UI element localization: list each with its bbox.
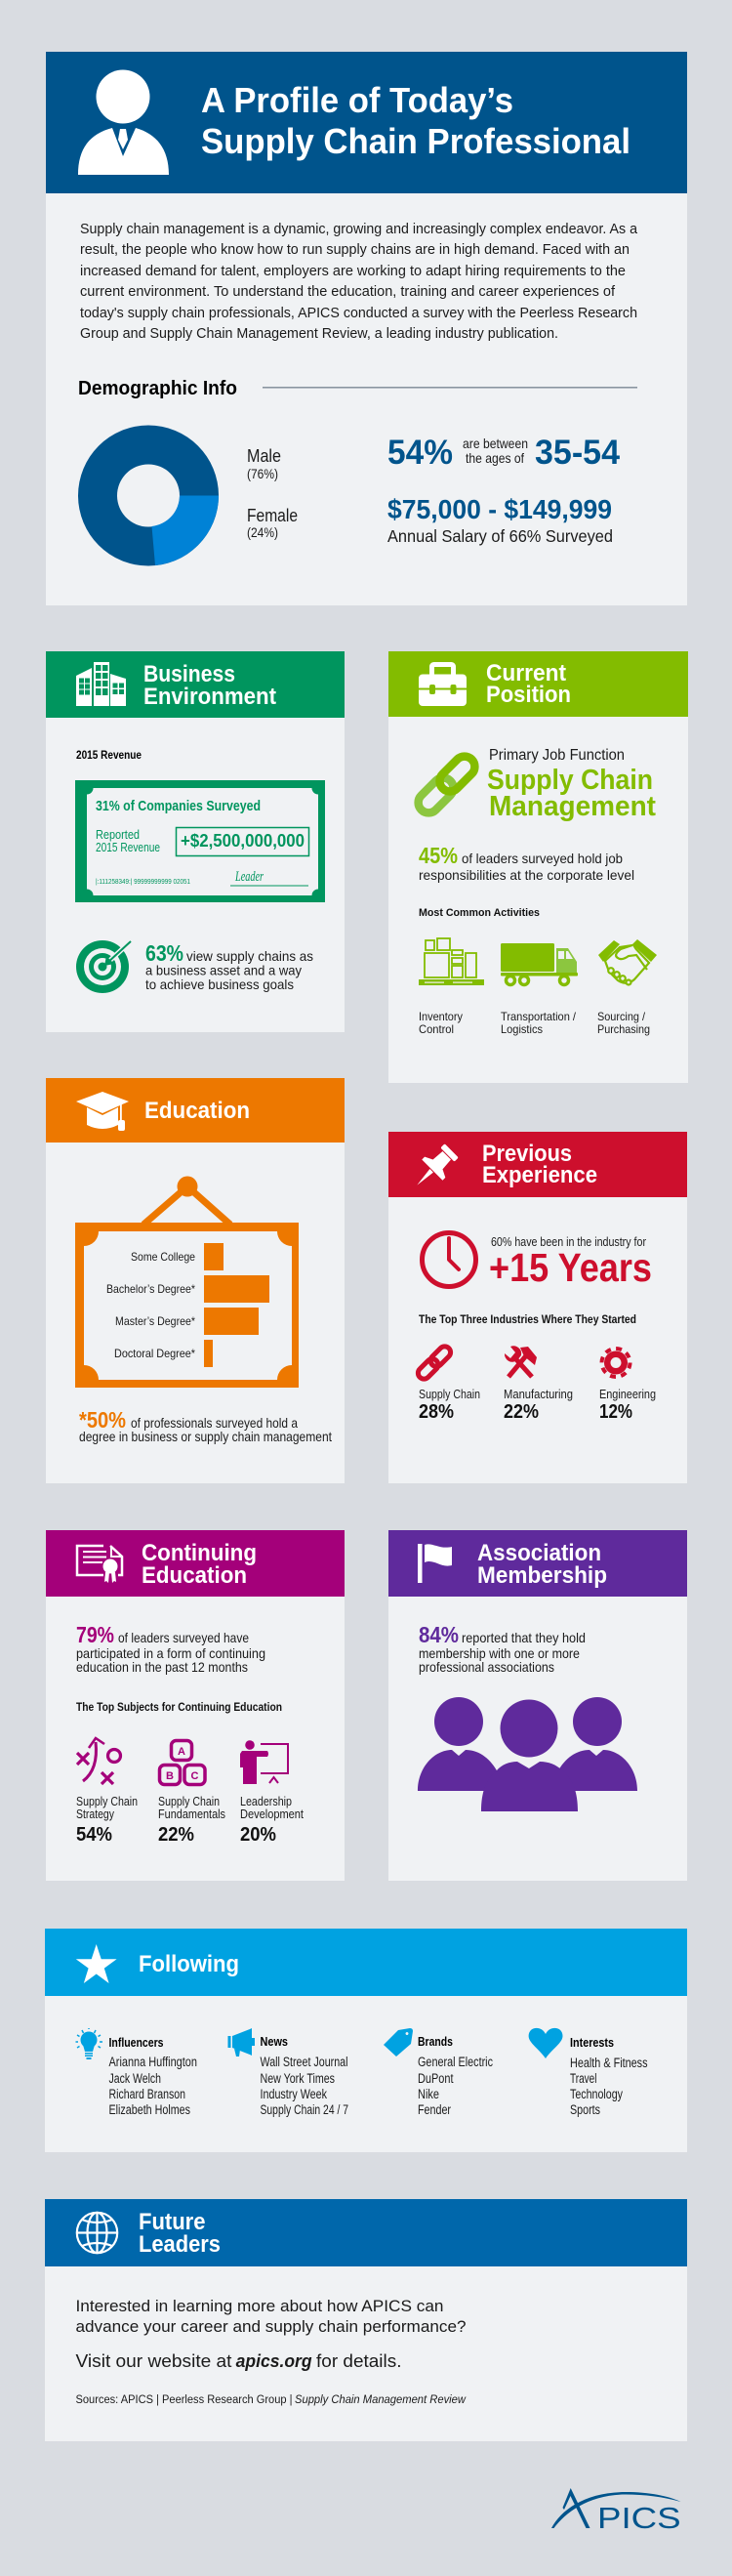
heading: association membership: Membership <box>477 1562 607 1589</box>
list: news: Industry Week <box>260 2087 327 2101</box>
heading: future leaders: Future <box>139 2209 205 2235</box>
heading: business environment: Business <box>143 661 235 687</box>
list: brands <box>418 2035 493 2117</box>
legend: male: (76%) <box>247 466 278 481</box>
primary job function: Management <box>489 791 656 822</box>
stat: salary <box>387 494 613 546</box>
icon: briefcase <box>419 664 467 706</box>
intro paragraph: result, the people who know how to run supply chains are in high demand. Faced with an <box>80 241 630 258</box>
heading: future leaders <box>139 2209 221 2258</box>
icon: letter blocks: A <box>178 1746 185 1758</box>
list: brands: General Electric <box>418 2055 493 2069</box>
labels: activities: Sourcing / <box>597 1010 646 1023</box>
heading: demographic info: Demographic Info <box>78 378 237 399</box>
sources: Sources: APICS | Peerless Research Group | <box>76 2394 293 2406</box>
heading: previous experience: Previous <box>482 1141 572 1167</box>
sources <box>76 2394 467 2406</box>
heading: continuing education: Education <box>142 1562 247 1589</box>
values: subjects: 54% <box>76 1824 112 1846</box>
list: influencers <box>109 2036 197 2117</box>
donut chart: gender <box>78 426 219 566</box>
labels: activities: Control <box>419 1022 454 1036</box>
stat: age: 54% <box>387 434 453 472</box>
icon: target <box>76 940 132 993</box>
intro paragraph: today's supply chain professionals, APICS conducted a survey with the Peerless Research <box>80 305 637 321</box>
heading: current position: Current <box>486 660 566 686</box>
heading: continuing education: Continuing <box>142 1540 257 1566</box>
labels: industries: Supply Chain <box>419 1388 480 1401</box>
stat: 45 percent: 45% <box>419 843 458 868</box>
list: influencers: Arianna Huffington <box>109 2055 197 2069</box>
labels: degree levels <box>106 1250 195 1360</box>
icon: graduation cap <box>76 1092 129 1131</box>
list: interests: Health & Fitness <box>570 2056 648 2070</box>
labels: subjects: Supply Chain <box>76 1795 138 1808</box>
header band: profile <box>46 52 687 193</box>
labels: activities: Logistics <box>501 1022 543 1036</box>
heading: current position <box>486 660 571 708</box>
stat: 45 percent: of leaders surveyed hold job <box>462 851 623 866</box>
labels: activities: Inventory <box>419 1010 463 1023</box>
legend: male: Male <box>247 446 281 466</box>
labels: industries: Engineering <box>599 1388 656 1401</box>
heading: business environment: Environment <box>143 684 276 710</box>
call to action text: for details. <box>316 2350 402 2371</box>
list: brands: DuPont <box>418 2071 454 2086</box>
panel: current position <box>388 651 688 1083</box>
labels: industries <box>419 1388 656 1401</box>
heading: current position: Position <box>486 682 571 708</box>
legend: female: Female <box>247 506 298 525</box>
list: news: New York Times <box>260 2071 335 2086</box>
icon: light bulb <box>76 2028 102 2059</box>
labels: subjects: Leadership <box>240 1795 292 1808</box>
stat: 79 percent: participated in a form of continuing <box>76 1645 265 1661</box>
primary job function <box>487 747 656 822</box>
panel: continuing education <box>46 1530 345 1881</box>
icon: letter blocks <box>160 1740 205 1785</box>
stat: 45 percent <box>419 843 634 883</box>
list: news: Supply Chain 24 / 7 <box>260 2102 348 2117</box>
heading: association membership: Association <box>477 1540 601 1566</box>
stat: 84 percent: membership with one or more <box>419 1645 580 1661</box>
legend: female <box>247 506 298 540</box>
stat: 45 percent: responsibilities at the corporate level <box>419 867 634 883</box>
icon: professional person <box>78 70 169 175</box>
title <box>201 80 630 161</box>
list: interests: Interests <box>570 2036 614 2050</box>
labels: subjects: Supply Chain <box>158 1795 220 1808</box>
list: interests: Travel <box>570 2071 597 2086</box>
stat: 63 percent: view supply chains as <box>186 948 313 964</box>
labels: subjects <box>76 1795 304 1821</box>
check graphic: Reported <box>96 828 140 842</box>
labels: subjects: Development <box>240 1807 304 1821</box>
stat: 84 percent: professional associations <box>419 1659 554 1675</box>
labels: degree levels: Bachelor’s Degree* <box>106 1282 195 1296</box>
intro paragraph: Supply chain management is a dynamic, growing and increasingly complex endeavor. As a <box>80 221 638 237</box>
icon: certificate <box>77 1546 122 1583</box>
panel: business environment <box>46 651 345 1032</box>
check graphic: 31% of Companies Surveyed <box>96 798 261 814</box>
heading: education: Education <box>144 1098 250 1124</box>
heading: continuing education <box>142 1540 257 1589</box>
list: news <box>260 2035 348 2117</box>
stat: 84 percent: 84% <box>419 1622 459 1647</box>
list: influencers: Elizabeth Holmes <box>109 2102 190 2117</box>
call to action text: advance your career and supply chain performance? <box>76 2317 466 2336</box>
stat: age: the ages of <box>466 450 524 466</box>
icon: star <box>76 1944 117 1983</box>
title: A Profile of Today’s <box>201 80 513 120</box>
logo: APICS: PICS <box>597 2501 681 2535</box>
labels: subjects: Fundamentals <box>158 1807 225 1821</box>
icon: gear <box>601 1349 630 1377</box>
values: industries: 12% <box>599 1401 632 1423</box>
stat: salary: Annual Salary of 66% Surveyed <box>387 526 613 546</box>
values: industries: 28% <box>419 1401 454 1423</box>
heading: business environment <box>143 661 276 710</box>
heading: previous experience: Experience <box>482 1162 597 1188</box>
label: top three industries: The Top Three Industries Where They Started <box>419 1312 636 1326</box>
icon: letter blocks: B <box>166 1770 174 1782</box>
icon: globe <box>77 2213 117 2253</box>
list: news: Wall Street Journal <box>260 2055 347 2069</box>
icon: truck <box>501 943 578 984</box>
stat: age: are between <box>463 436 528 451</box>
call to action text: apics.org <box>236 2350 312 2371</box>
labels: activities: Transportation / <box>501 1010 577 1023</box>
icon: handshake <box>598 939 657 984</box>
intro paragraph: increased demand for talent, employers are working to adapt hiring requirements to the <box>80 263 626 279</box>
icon: clock <box>422 1232 476 1287</box>
labels: activities: Purchasing <box>597 1022 650 1036</box>
stat: 15 years: +15 Years <box>489 1245 652 1290</box>
list: brands: Fender <box>418 2102 451 2117</box>
values: subjects: 20% <box>240 1824 276 1846</box>
sources: Supply Chain Management Review <box>295 2394 467 2406</box>
list: interests: Technology <box>570 2087 623 2101</box>
check graphic: |:111258349:| 99999999999 02051 <box>96 879 190 886</box>
list: brands: Brands <box>418 2035 453 2049</box>
stat: 50 percent: degree in business or supply chain management <box>79 1429 332 1444</box>
stat: 84 percent <box>419 1622 586 1675</box>
label: 2015 revenue: 2015 Revenue <box>76 750 142 762</box>
call to action text: Visit our website at <box>76 2350 232 2371</box>
stat: 63 percent <box>145 940 313 992</box>
stat: age <box>387 434 621 472</box>
list: influencers: Influencers <box>109 2036 164 2050</box>
bars: degree levels <box>204 1243 269 1367</box>
stat: 50 percent: of professionals surveyed hold a <box>131 1415 298 1431</box>
icon: presenter <box>240 1740 288 1784</box>
stat: 15 years: 60% have been in the industry for <box>491 1234 647 1249</box>
icon: letter blocks: C <box>191 1770 199 1782</box>
labels: degree levels: Doctoral Degree* <box>114 1347 195 1360</box>
icon: small chain <box>416 1344 453 1382</box>
check graphic: Leader <box>234 869 264 885</box>
heading: following: Following <box>139 1951 239 1977</box>
stat: 79 percent: 79% <box>76 1622 114 1647</box>
list: interests: Sports <box>570 2102 600 2117</box>
primary job function: Supply Chain <box>487 765 653 796</box>
label: most common activities: Most Common Activities <box>419 907 540 919</box>
check graphic <box>75 780 325 902</box>
stat: 79 percent: education in the past 12 months <box>76 1659 248 1675</box>
label: top subjects: The Top Subjects for Continuing Education <box>76 1700 282 1714</box>
stat: 84 percent: reported that they hold <box>462 1630 586 1645</box>
title: Supply Chain Professional <box>201 121 630 161</box>
stat: 79 percent: of leaders surveyed have <box>118 1630 249 1645</box>
icon: strategy <box>77 1738 121 1784</box>
list: interests <box>570 2036 648 2117</box>
heading: association membership <box>477 1540 607 1589</box>
stat: age: 35-54 <box>535 434 621 472</box>
stat: 63 percent: a business asset and a way <box>145 963 302 978</box>
call to action text <box>76 2297 466 2371</box>
icon: push pin <box>407 1141 462 1195</box>
list: influencers: Richard Branson <box>109 2087 185 2101</box>
stat: 50 percent: *50% <box>79 1407 126 1433</box>
icon: group of people <box>418 1697 637 1811</box>
stat: 50 percent <box>79 1407 332 1444</box>
stat: salary: $75,000 - $149,999 <box>387 494 612 524</box>
primary job function: Primary Job Function <box>489 747 625 764</box>
panel: future leaders <box>45 2199 687 2441</box>
stat: 79 percent <box>76 1622 265 1675</box>
labels: degree levels: Some College <box>131 1250 195 1264</box>
labels: industries: Manufacturing <box>504 1388 573 1401</box>
panel: intro and demographics <box>46 52 687 605</box>
panel: following <box>45 1929 687 2152</box>
intro paragraph <box>80 221 638 342</box>
check graphic: +$2,500,000,000 <box>181 831 305 851</box>
list: brands: Nike <box>418 2087 439 2101</box>
intro paragraph: current environment. To understand the education, training and career experiences of <box>80 283 616 300</box>
panel: previous experience <box>388 1132 687 1483</box>
stat: 63 percent: 63% <box>145 940 183 966</box>
icon: heart <box>529 2028 562 2058</box>
intro paragraph: Group and Supply Chain Management Review, a leading industry publication. <box>80 325 558 342</box>
values: subjects <box>76 1824 276 1846</box>
values: subjects: 22% <box>158 1824 194 1846</box>
call to action text: Interested in learning more about how APICS can <box>76 2297 444 2315</box>
labels: degree levels: Master’s Degree* <box>115 1314 195 1328</box>
stat: 63 percent: to achieve business goals <box>145 976 294 992</box>
logo: APICS <box>551 2488 681 2535</box>
legend: male <box>247 446 281 481</box>
icon: flag <box>418 1544 452 1583</box>
legend: female: (24%) <box>247 524 278 540</box>
heading: future leaders: Leaders <box>139 2231 221 2258</box>
check graphic: 2015 Revenue <box>96 841 160 854</box>
heading: previous experience <box>482 1141 597 1188</box>
values: industries <box>419 1401 632 1423</box>
icon: inventory <box>419 938 484 985</box>
icon: buildings <box>76 662 126 706</box>
icon: megaphone <box>228 2028 255 2057</box>
hanging sign chart <box>75 1176 299 1388</box>
icon: chain link <box>414 752 479 817</box>
panel: association membership <box>388 1530 687 1881</box>
icon: price tag <box>384 2028 413 2057</box>
labels: activities <box>419 1010 650 1036</box>
list: influencers: Jack Welch <box>109 2071 161 2086</box>
values: industries: 22% <box>504 1401 539 1423</box>
list: news: News <box>260 2035 288 2049</box>
panel: education <box>46 1078 345 1483</box>
icon: tools <box>505 1346 537 1377</box>
labels: subjects: Strategy <box>76 1807 115 1821</box>
